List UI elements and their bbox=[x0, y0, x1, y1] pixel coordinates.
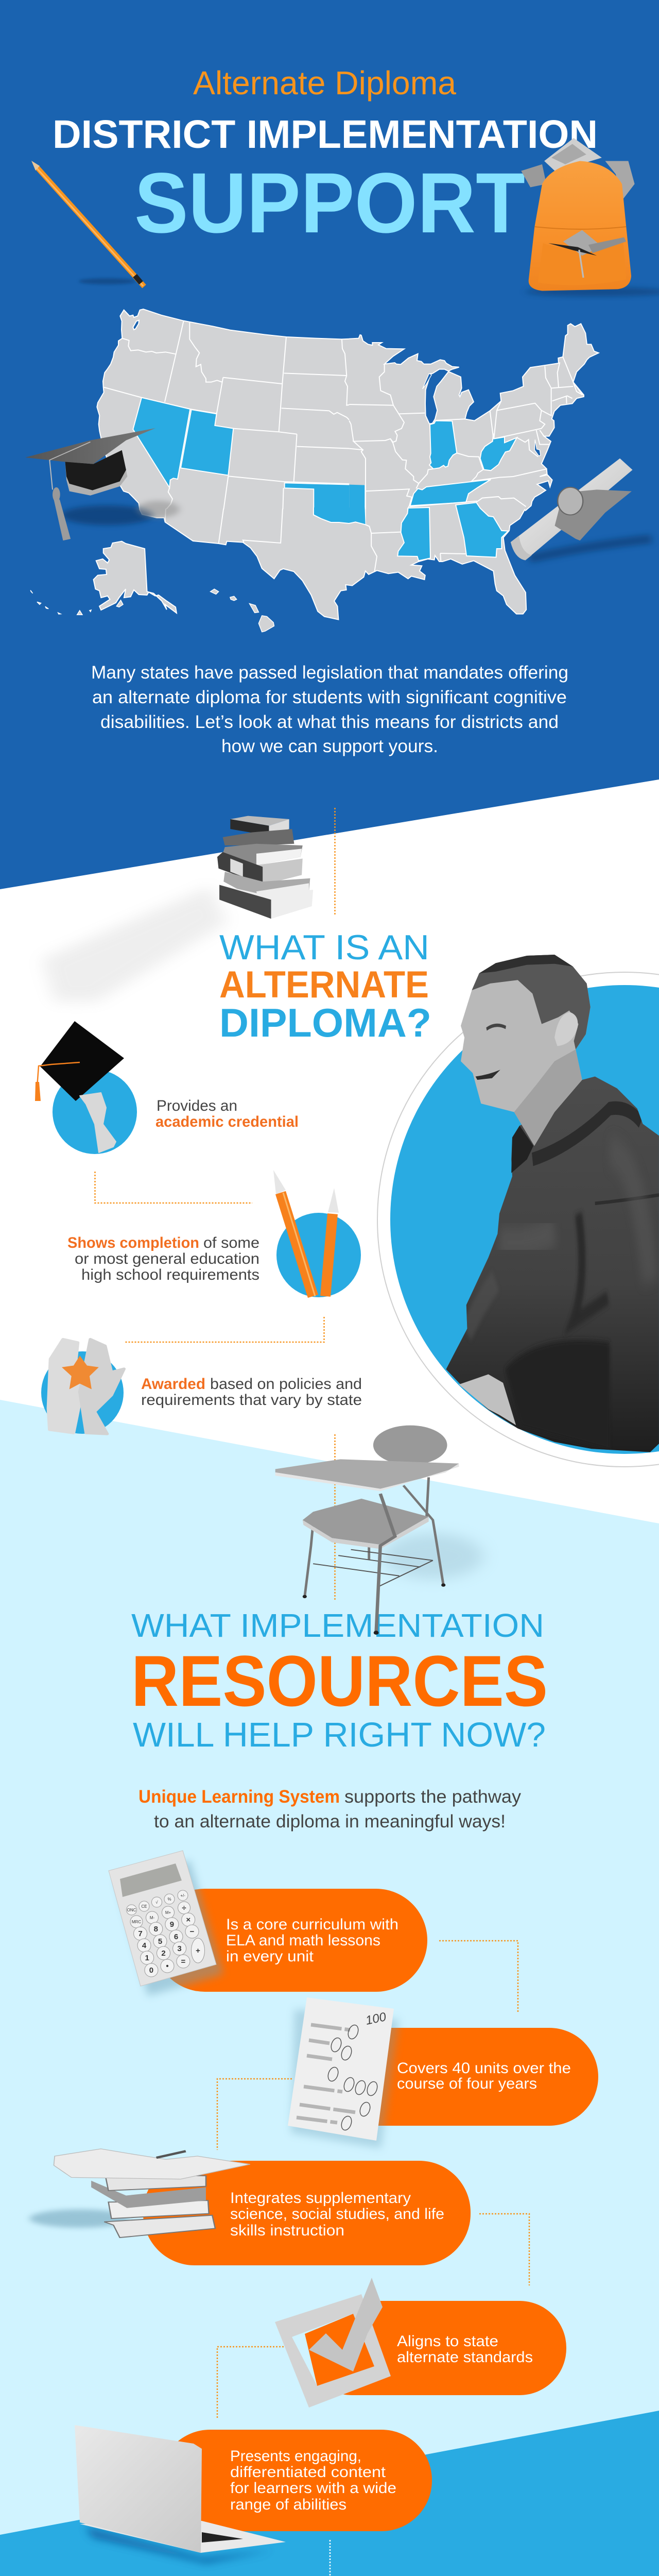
panel: student photo in blue circle bbox=[377, 955, 659, 1467]
state: Mississippi bbox=[397, 507, 430, 561]
icon: graded test paper bbox=[288, 1997, 399, 2148]
intro: Unique Learning System bbox=[138, 1787, 522, 1832]
heading: what implementation resources: WILL HELP RIGHT NOW? bbox=[133, 1716, 546, 1754]
pill 1: core curriculum: ELA and math lessons bbox=[226, 1932, 380, 1949]
text: awarded bbox=[141, 1376, 362, 1409]
title line: Support: SUPPORT bbox=[134, 156, 525, 251]
pill 5: differentiated content: Presents engaging, bbox=[230, 2448, 361, 2465]
icon: calculator: M- bbox=[150, 1916, 154, 1920]
icon: calculator: √ bbox=[155, 1900, 158, 1905]
icon: calculator: 5 bbox=[158, 1937, 162, 1946]
icon: calculator: 3 bbox=[177, 1944, 182, 1953]
icon: calculator: % bbox=[167, 1897, 171, 1902]
text: shows completion: Shows completion bbox=[67, 1234, 199, 1251]
icon: stack of books with open book bbox=[29, 2149, 250, 2238]
heading: What is an alternate diploma: DIPLOMA? bbox=[219, 1000, 431, 1045]
student hand bbox=[459, 1375, 516, 1425]
state: Oklahoma lower bbox=[314, 507, 366, 524]
Alaska bbox=[94, 541, 177, 613]
icon: stack of books bbox=[42, 816, 313, 1002]
panel: bright blue benefits background bbox=[0, 2411, 659, 2576]
icon: calculator: CE bbox=[141, 1904, 147, 1909]
student hair bbox=[472, 955, 591, 1049]
item: awarded based on policies bbox=[41, 1340, 362, 1434]
pill 2: 40 units: course of four years bbox=[397, 2075, 537, 2092]
state: Nevada bbox=[133, 398, 190, 488]
icon: calculator: 9 bbox=[170, 1920, 174, 1929]
intro: Unique Learning System: to an alternate diploma in meaningful ways! bbox=[154, 1811, 506, 1832]
icon: calculator: • bbox=[166, 1962, 169, 1971]
text: provides an academic credential: Provides an bbox=[157, 1097, 237, 1114]
dotted connector bbox=[217, 2079, 292, 2150]
pill 3: supplementary instruction bbox=[143, 2161, 471, 2265]
dotted connector bbox=[439, 1941, 518, 2012]
icon: calculator: ONC bbox=[127, 1908, 136, 1912]
pill 5: differentiated content: for learners with a wide bbox=[230, 2480, 396, 2497]
student face and neck bbox=[461, 955, 591, 1146]
text: provides an academic credential bbox=[155, 1097, 299, 1130]
map: west bbox=[97, 309, 351, 511]
dotted connector bbox=[95, 1172, 252, 1203]
heading: What is an alternate diploma bbox=[219, 928, 431, 1045]
dotted connector bbox=[479, 2214, 529, 2285]
panel: dark blue header background bbox=[0, 0, 659, 889]
heading: What is an alternate diploma: WHAT IS AN bbox=[219, 928, 429, 967]
intro paragraph: Many states have passed legislation that mandates offering bbox=[91, 663, 568, 683]
pill 5: differentiated content: range of abilities bbox=[230, 2496, 346, 2513]
pill 5: differentiated content: differentiated content bbox=[230, 2464, 386, 2481]
state: Tennessee bbox=[410, 480, 491, 506]
intro paragraph: disabilities. Let’s look at what this means for districts and bbox=[100, 712, 559, 732]
intro paragraph bbox=[91, 663, 568, 756]
dotted connector bbox=[217, 2347, 284, 2419]
pill 3: supplementary instruction: skills instruction bbox=[230, 2222, 344, 2239]
icon: calculator: × bbox=[186, 1916, 190, 1924]
icon: laptop bbox=[75, 2425, 286, 2563]
icon: orange pencil top left bbox=[31, 161, 144, 286]
pill 2: 40 units bbox=[330, 2028, 598, 2126]
icon: two pencils in blue circle bbox=[273, 1170, 361, 1297]
icon: orange backpack bbox=[521, 138, 659, 296]
icon: calculator: +/- bbox=[180, 1893, 185, 1898]
text: awarded: based on policies and bbox=[210, 1376, 362, 1393]
text: provides an academic credential: academic credential bbox=[155, 1113, 299, 1130]
icon: calculator: − bbox=[190, 1927, 195, 1936]
map of United States with alternate diploma states highlighted bbox=[30, 309, 599, 632]
title line: Alternate Diploma: Alternate Diploma bbox=[193, 64, 456, 101]
intro paragraph: how we can support yours. bbox=[221, 736, 438, 756]
icon: hands holding orange star in blue circle bbox=[41, 1340, 124, 1434]
icon: calculator: MRC bbox=[132, 1920, 141, 1924]
title line: District Implementation: DISTRICT IMPLEMENTATION bbox=[53, 112, 598, 157]
icon: calculator: M+ bbox=[165, 1910, 171, 1915]
pill 1: core curriculum: Is a core curriculum with bbox=[226, 1916, 398, 1933]
icon: graded test paper: 100 bbox=[365, 2010, 388, 2028]
heading: what implementation resources: RESOURCES bbox=[131, 1640, 548, 1721]
panel: light blue resources background bbox=[0, 1400, 659, 2535]
pill 4: state alternate standards: Aligns to state bbox=[397, 2333, 498, 2350]
icon: calculator: 8 bbox=[154, 1925, 158, 1934]
item: general education requirements bbox=[67, 1170, 361, 1297]
dotted connector: white bbox=[330, 2540, 331, 2576]
text: shows completion: of some bbox=[203, 1234, 259, 1251]
pill 1: core curriculum bbox=[153, 1889, 427, 1992]
icon: hand holding up cap in blue circle bbox=[35, 1021, 137, 1154]
icon: calculator: 1 bbox=[145, 1954, 149, 1962]
icon: rolled diploma with medal bbox=[511, 459, 651, 560]
icon: calculator: 4 bbox=[142, 1941, 147, 1950]
icon: calculator bbox=[109, 1851, 223, 1996]
map: east bbox=[349, 324, 599, 511]
student hoodie bbox=[446, 1076, 659, 1452]
text: awarded: requirements that vary by state bbox=[141, 1392, 362, 1409]
pill 3: supplementary instruction: science, social studies, and life bbox=[230, 2206, 444, 2223]
state: Utah bbox=[181, 410, 233, 476]
intro paragraph: an alternate diploma for students with significant cognitive bbox=[92, 687, 567, 707]
Hawaii and Aleutian islands bbox=[30, 589, 274, 632]
icon: school desk bbox=[275, 1426, 483, 1635]
title block bbox=[53, 64, 598, 251]
icon: calculator: 0 bbox=[149, 1966, 153, 1975]
icon: calculator: 2 bbox=[161, 1949, 166, 1958]
dotted connector: books to heading bbox=[334, 808, 336, 916]
state: West Virginia bbox=[480, 434, 517, 470]
map: south bbox=[30, 501, 526, 632]
pill 2: 40 units: Covers 40 units over the bbox=[397, 2060, 571, 2077]
text: shows completion bbox=[67, 1234, 259, 1283]
icon: calculator: 7 bbox=[138, 1929, 143, 1938]
intro: Unique Learning System: Unique Learning System bbox=[138, 1787, 340, 1807]
text: shows completion: or most general education bbox=[75, 1250, 259, 1267]
pill 4: state alternate standards: alternate standards bbox=[397, 2349, 533, 2366]
icon: calculator: 6 bbox=[174, 1933, 178, 1941]
pill 4: state alternate standards bbox=[305, 2301, 566, 2395]
pill 3: supplementary instruction: Integrates supplementary bbox=[230, 2190, 411, 2207]
heading: what implementation resources bbox=[131, 1607, 548, 1754]
state: Georgia bbox=[456, 502, 508, 557]
pill 5: differentiated content bbox=[160, 2430, 432, 2531]
heading: What is an alternate diploma: ALTERNATE bbox=[219, 964, 429, 1006]
dotted connector: desk to heading bbox=[334, 1434, 336, 1601]
text: awarded: Awarded bbox=[141, 1376, 205, 1393]
icon: calculator: ÷ bbox=[182, 1904, 186, 1912]
text: shows completion: high school requirements bbox=[81, 1266, 259, 1283]
state: Indiana bbox=[429, 421, 457, 469]
dotted connector bbox=[125, 1317, 324, 1342]
icon: black graduation cap bbox=[25, 428, 180, 540]
Lake Michigan bbox=[425, 369, 449, 424]
pill 1: core curriculum: in every unit bbox=[226, 1948, 314, 1965]
icon: calculator: = bbox=[181, 1957, 186, 1966]
item: academic credential bbox=[35, 1021, 299, 1154]
icon: calculator: + bbox=[196, 1946, 200, 1955]
intro: Unique Learning System: supports the pathway bbox=[344, 1787, 522, 1807]
heading: what implementation resources: WHAT IMPLEMENTATION bbox=[131, 1607, 544, 1644]
icon: wooden check mark in box bbox=[275, 2278, 391, 2408]
